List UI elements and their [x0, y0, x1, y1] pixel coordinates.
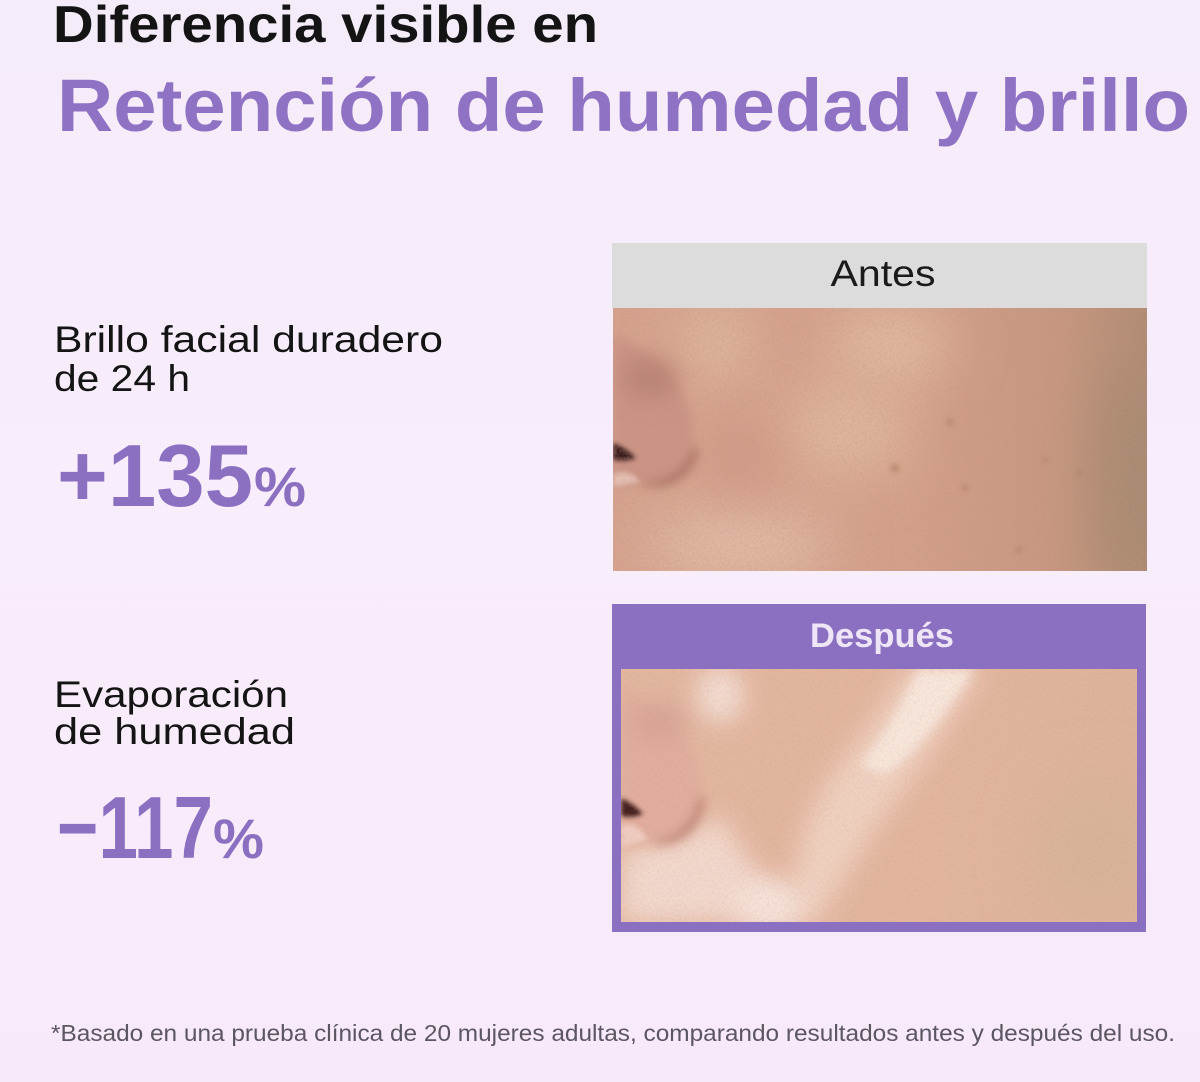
metric value: -117%: −117 — [57, 778, 213, 877]
after frame and header — [612, 604, 1146, 932]
footnote: *Basado en una prueba clínica de 20 mujeres adultas, comparando resultados antes y después del uso. — [51, 1020, 1175, 1046]
title: highlighted line: Retención de humedad y brillo — [57, 64, 1190, 147]
nostril — [621, 798, 643, 817]
lower-left shine — [621, 812, 768, 922]
panel: before — [612, 243, 1147, 571]
metric value: -117%: % — [213, 807, 264, 870]
shine band — [790, 669, 985, 922]
metric label: glow: de 24 h — [54, 358, 190, 399]
metric: facial glow — [54, 319, 443, 525]
nostril — [613, 443, 636, 461]
metric value: +135%: +135 — [57, 426, 253, 525]
metric label: evaporation: de humedad — [54, 711, 295, 752]
before skin photo — [613, 308, 1147, 571]
panel: after — [612, 604, 1155, 932]
before header: Antes — [830, 253, 936, 294]
metric label: glow: Brillo facial duradero — [54, 319, 443, 360]
nose — [627, 704, 692, 845]
after skin photo — [621, 667, 1155, 931]
nose — [613, 335, 692, 486]
before header — [612, 243, 1147, 308]
blemishes — [890, 418, 1046, 552]
after frame and header: Después — [810, 617, 954, 655]
nose-side shine — [696, 667, 744, 723]
metric label: evaporation: Evaporación — [54, 674, 288, 715]
metric value: +135%: % — [254, 455, 306, 518]
metric: moisture evaporation — [54, 674, 295, 877]
